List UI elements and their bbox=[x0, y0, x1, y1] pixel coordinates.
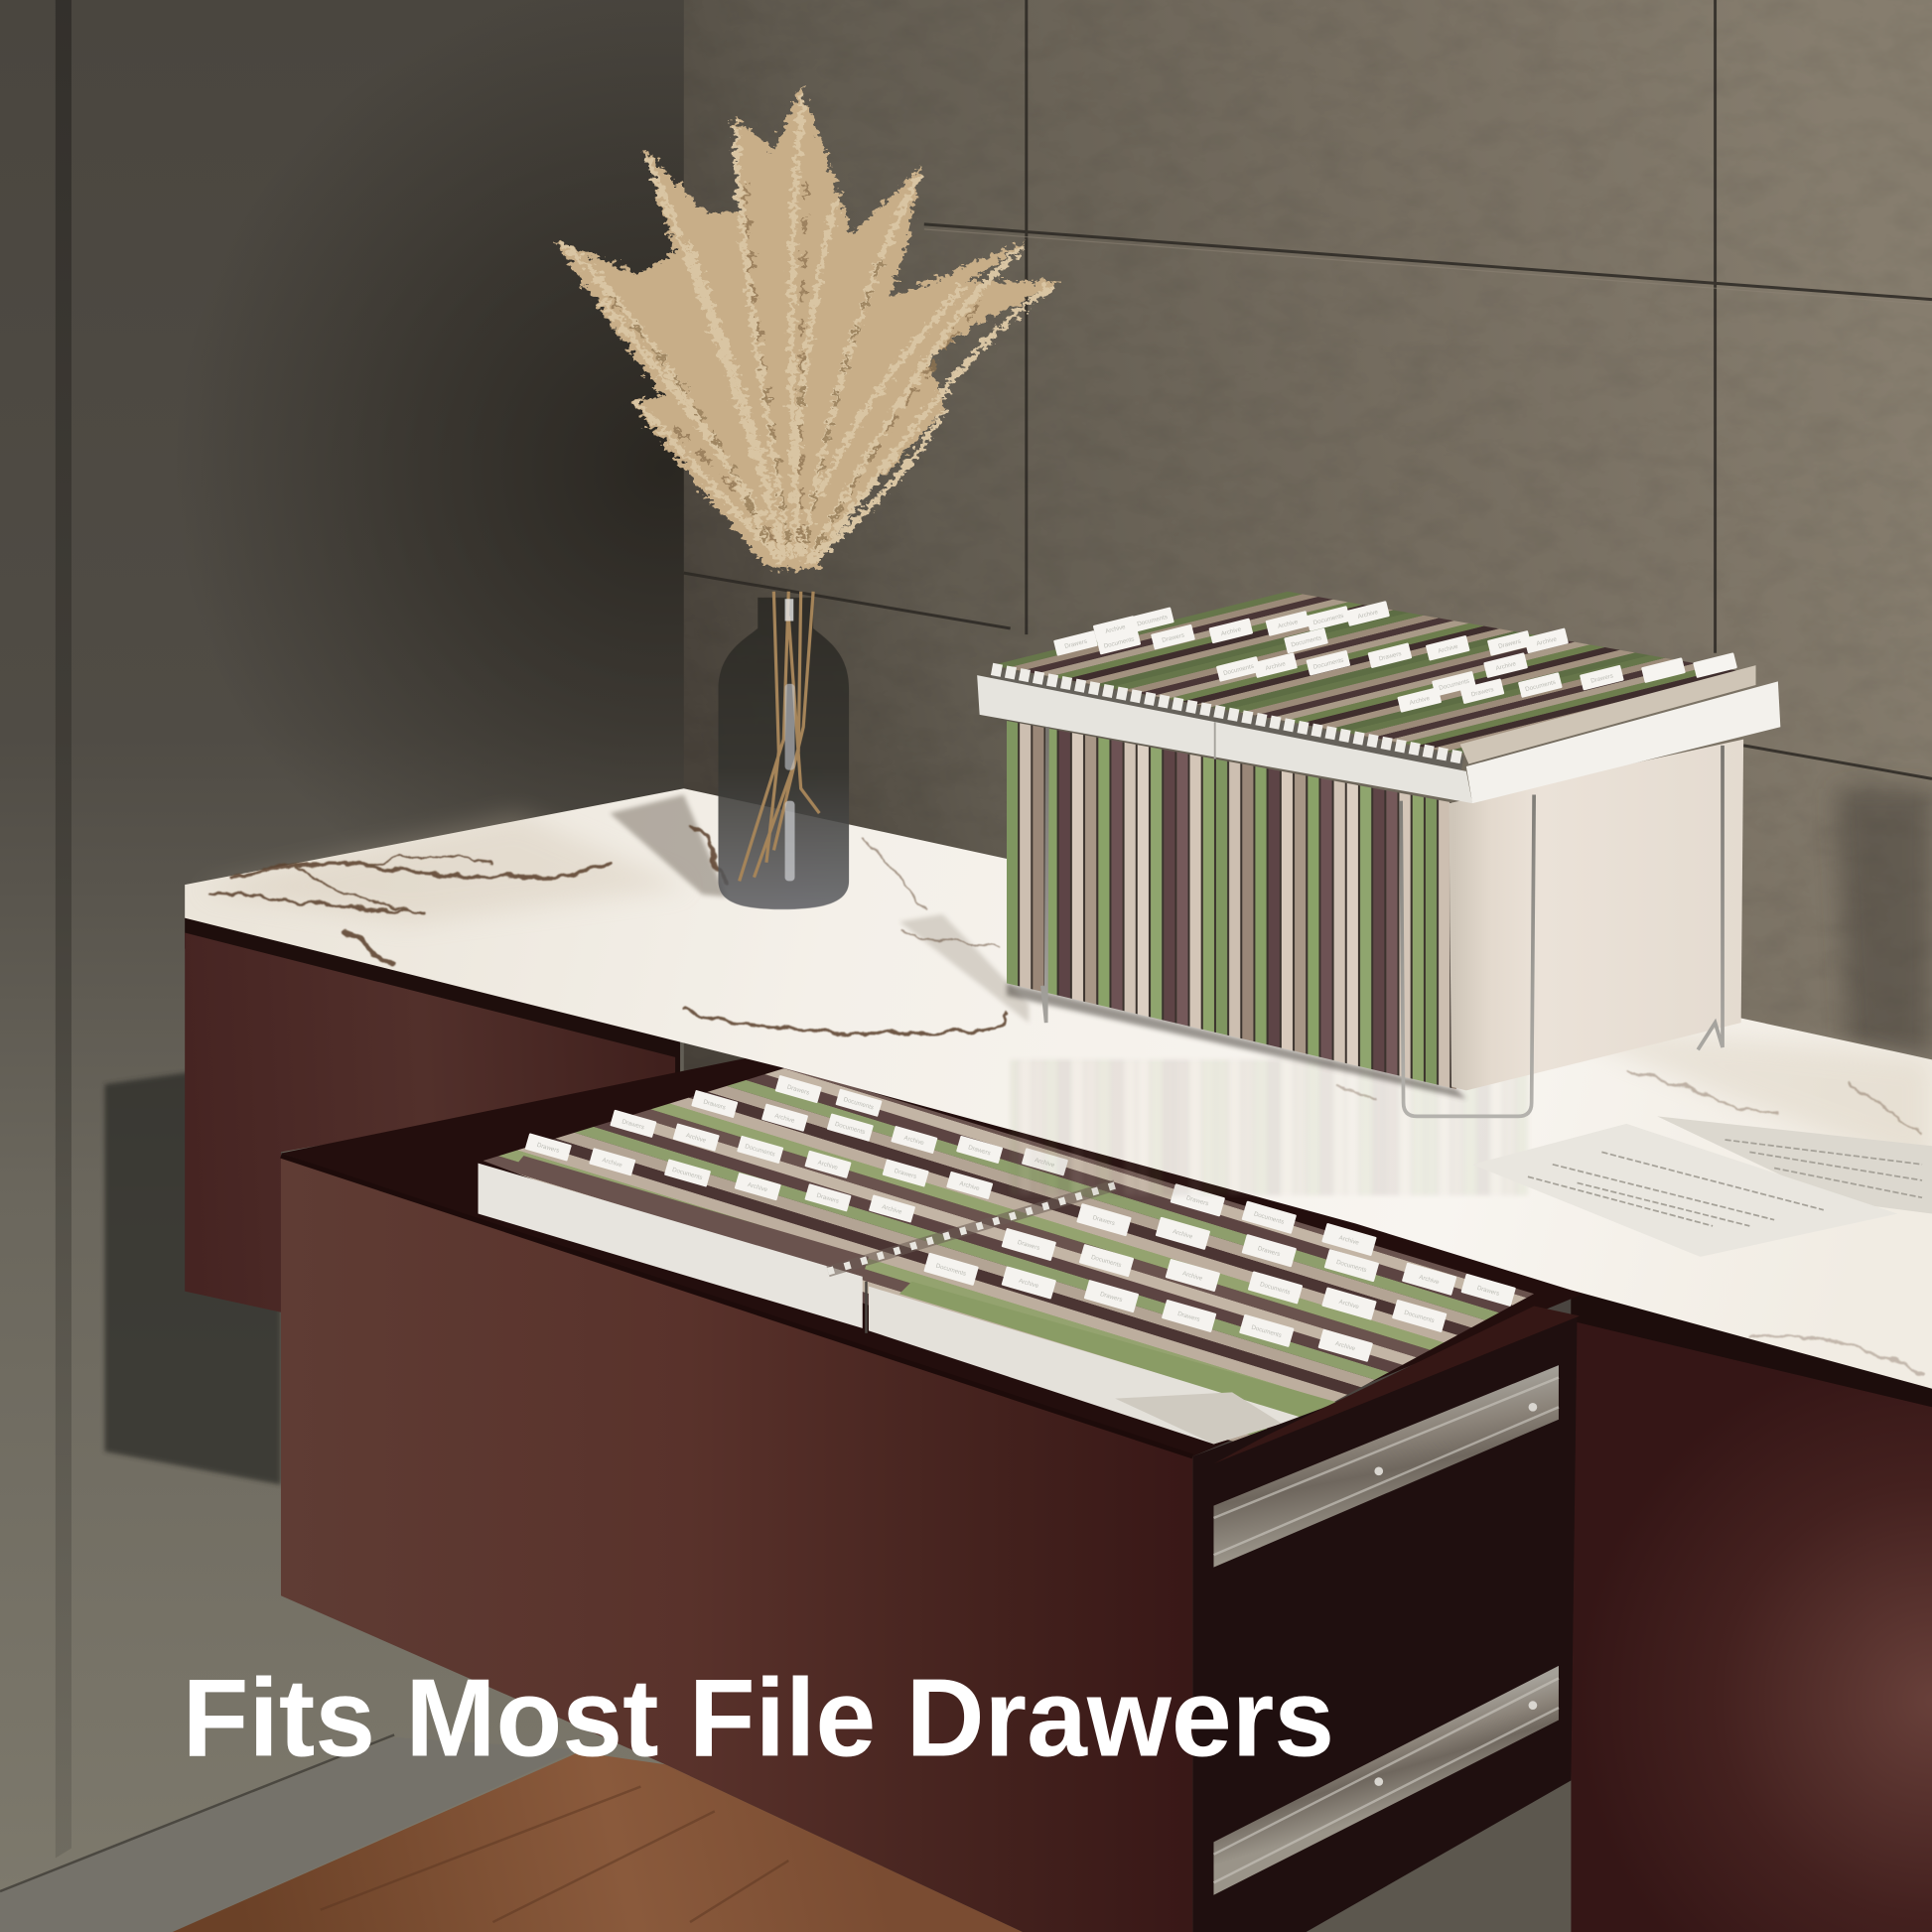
file tabs in drawer: Documents bbox=[1090, 1254, 1122, 1269]
file tabs in drawer: Documents bbox=[671, 1167, 703, 1181]
file tabs in drawer: Documents bbox=[1403, 1310, 1435, 1324]
file tabs in drawer: Archive bbox=[1418, 1274, 1441, 1287]
file tabs in drawer: Archive bbox=[959, 1180, 981, 1192]
file tabs in box: Drawers bbox=[1498, 638, 1522, 650]
file tabs in drawer: Drawers bbox=[786, 1084, 810, 1097]
panel: wood floor bbox=[173, 1752, 1023, 1932]
upper drawer slide rail bbox=[1213, 1365, 1559, 1568]
file tabs in drawer: Archive bbox=[1338, 1299, 1360, 1311]
chrome wire legs bbox=[1042, 727, 1723, 1116]
file tabs in drawer: Drawers bbox=[894, 1168, 917, 1180]
lower drawer slide rail bbox=[1213, 1666, 1559, 1895]
panel: marble countertop bbox=[185, 788, 1932, 1389]
file tabs in drawer: Documents bbox=[1335, 1259, 1367, 1274]
file tabs in box: Documents bbox=[1312, 613, 1344, 626]
file tabs in drawer: Drawers bbox=[1257, 1245, 1281, 1258]
hanging file stripes bbox=[1007, 715, 1456, 1090]
drawer front face bbox=[281, 1156, 1192, 1932]
file tabs in drawer: Documents bbox=[834, 1121, 866, 1136]
file tabs in drawer: Archive bbox=[602, 1157, 623, 1170]
panel: white hanging file box bbox=[977, 592, 1780, 1116]
file tabs in drawer: Drawers bbox=[621, 1118, 645, 1131]
file tabs in drawer: Archive bbox=[1181, 1270, 1204, 1283]
file tabs in drawer: Archive bbox=[903, 1135, 925, 1147]
file tabs in drawer: Documents bbox=[1251, 1324, 1283, 1339]
file tabs in box: Documents bbox=[1103, 635, 1135, 650]
file tabs in box: Documents bbox=[1525, 679, 1557, 693]
file tabs in drawer: Documents bbox=[1253, 1210, 1285, 1226]
file tabs in drawer: Archive bbox=[817, 1160, 839, 1172]
file tabs in box: Documents bbox=[1222, 663, 1255, 677]
panel: left closed drawer bbox=[185, 918, 680, 1312]
file tabs in box bbox=[1053, 601, 1737, 713]
title: Fits Most File Drawers bbox=[183, 1656, 1334, 1780]
file tabs in drawer: Documents bbox=[843, 1096, 875, 1111]
file tabs in box: Archive bbox=[1277, 619, 1300, 630]
file tabs in drawer: Drawers bbox=[1017, 1239, 1040, 1252]
icon: dried pampas grass bbox=[554, 86, 1059, 569]
file tabs in box: Drawers bbox=[1378, 650, 1402, 662]
file tabs in drawer: Archive bbox=[881, 1203, 903, 1216]
file tabs in drawer: Archive bbox=[1172, 1228, 1194, 1241]
file tabs in drawer: Documents bbox=[1259, 1281, 1291, 1297]
file tabs in drawer: Archive bbox=[1338, 1234, 1360, 1247]
panel: left wall bbox=[0, 0, 690, 1932]
file tabs in box: Archive bbox=[1495, 660, 1517, 672]
file tabs in box: Archive bbox=[1265, 660, 1287, 672]
file tabs in drawer: Drawers bbox=[1092, 1214, 1116, 1227]
shadow under box bbox=[1007, 983, 1466, 1099]
file tabs in drawer: Drawers bbox=[1176, 1311, 1200, 1323]
file tabs in box: Drawers bbox=[1470, 686, 1494, 698]
file tabs in drawer: Documents bbox=[744, 1143, 775, 1159]
file tabs in drawer: Archive bbox=[1018, 1278, 1039, 1290]
file tabs in drawer: Documents bbox=[935, 1263, 967, 1278]
file tabs in drawer: Archive bbox=[1034, 1157, 1056, 1170]
file tabs in box: Archive bbox=[1536, 635, 1558, 647]
drawer interior opening bbox=[281, 1047, 1584, 1456]
file tabs in box: Documents bbox=[1137, 614, 1169, 627]
file tabs in box: Documents bbox=[1439, 678, 1470, 692]
file tabs in box: Archive bbox=[1357, 609, 1379, 621]
box side panel bbox=[1449, 740, 1743, 1090]
drawer inner side wall bbox=[1192, 1313, 1578, 1932]
file tabs in box: Archive bbox=[1220, 625, 1242, 637]
file tabs in drawer: Drawers bbox=[816, 1192, 840, 1205]
file tabs in box: Archive bbox=[1438, 643, 1459, 655]
file tabs in box: Archive bbox=[1105, 623, 1127, 635]
file tabs in box: Documents bbox=[1291, 634, 1322, 648]
file tabs in box: Documents bbox=[1312, 656, 1344, 671]
icon: papers on countertop bbox=[1472, 1116, 1932, 1257]
file tabs in drawer: Drawers bbox=[1099, 1291, 1123, 1304]
file tabs in drawer: Drawers bbox=[1185, 1194, 1209, 1207]
file tabs in drawer: Drawers bbox=[536, 1142, 560, 1155]
file tabs in drawer: Archive bbox=[747, 1181, 768, 1193]
files seen from top bbox=[992, 592, 1756, 755]
file tabs in drawer: Drawers bbox=[703, 1098, 727, 1111]
file tabs in drawer: Drawers bbox=[967, 1144, 991, 1157]
file tabs in box: Archive bbox=[1409, 695, 1431, 707]
hanging files in drawer bbox=[479, 1067, 1534, 1445]
white front rail bbox=[977, 675, 1780, 803]
file tabs in box: Drawers bbox=[1162, 631, 1185, 644]
icon: glass vase with stems bbox=[719, 592, 849, 909]
panel: right closed drawer bbox=[1571, 1282, 1932, 1932]
file tabs in drawer: Archive bbox=[685, 1132, 707, 1145]
file tabs in drawer: Drawers bbox=[1476, 1285, 1500, 1298]
comb teeth on rail bbox=[992, 669, 1462, 763]
file tabs in drawer bbox=[525, 1075, 1516, 1362]
file tabs in drawer: Archive bbox=[773, 1112, 796, 1125]
panel: concrete tiled wall bbox=[684, 0, 1932, 1084]
panel: background behind open drawer bbox=[1307, 1780, 1571, 1932]
panel: open drawer bbox=[281, 1047, 1584, 1932]
file tabs in drawer: Archive bbox=[1334, 1340, 1356, 1353]
file tabs in box: Drawers bbox=[1590, 672, 1614, 685]
file tabs in box: Drawers bbox=[1064, 638, 1088, 650]
